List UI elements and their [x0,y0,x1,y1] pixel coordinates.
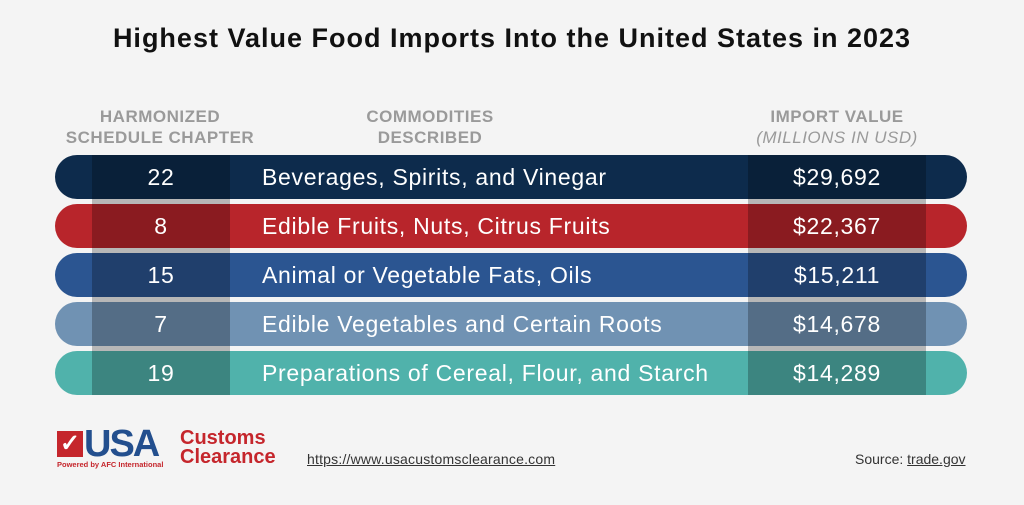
column shade: chapter [92,155,230,395]
row 4: $14,678 [793,311,881,337]
header: commodities: COMMODITIES [366,107,494,126]
header: commodities [366,107,494,147]
logo: Clearance [180,446,276,468]
header: chapter: HARMONIZED [100,107,220,126]
header: import value [756,107,918,147]
header: import value: (MILLIONS IN USD) [756,128,918,147]
row 4 [55,302,967,346]
row 1 [55,155,967,199]
row 3: Animal or Vegetable Fats, Oils [262,262,592,288]
header: chapter: SCHEDULE CHAPTER [66,128,254,147]
row 1: $29,692 [793,164,881,190]
row 3 [55,253,967,297]
row 5 [55,351,967,395]
header: import value: IMPORT VALUE [770,107,904,126]
row 4: Edible Vegetables and Certain Roots [262,311,662,337]
logo: Powered by AFC International [57,460,163,469]
row 2 [55,204,967,248]
row 4: 7 [154,311,168,337]
column shade: value [748,155,926,395]
logo [57,423,276,469]
row 2: $22,367 [793,213,881,239]
header: chapter [66,107,254,147]
row 5: 19 [148,360,174,386]
row 5: Preparations of Cereal, Flour, and Starch [262,360,709,386]
icon: checkbox: ✓ [60,430,80,457]
row 2: Edible Fruits, Nuts, Citrus Fruits [262,213,610,239]
row 1: Beverages, Spirits, and Vinegar [262,164,607,190]
row 5: $14,289 [793,360,881,386]
row 2: 8 [154,213,168,239]
logo: USA [84,423,158,465]
title: Highest Value Food Imports Into the United States in 2023 [113,23,911,53]
row 3: $15,211 [794,262,880,288]
row 1: 22 [148,164,174,190]
header: commodities: DESCRIBED [378,128,482,147]
row 3: 15 [148,262,174,288]
source: Source: trade.gov [855,451,966,467]
url: https://www.usacustomsclearance.com [307,451,555,467]
logo: Customs [180,427,266,449]
